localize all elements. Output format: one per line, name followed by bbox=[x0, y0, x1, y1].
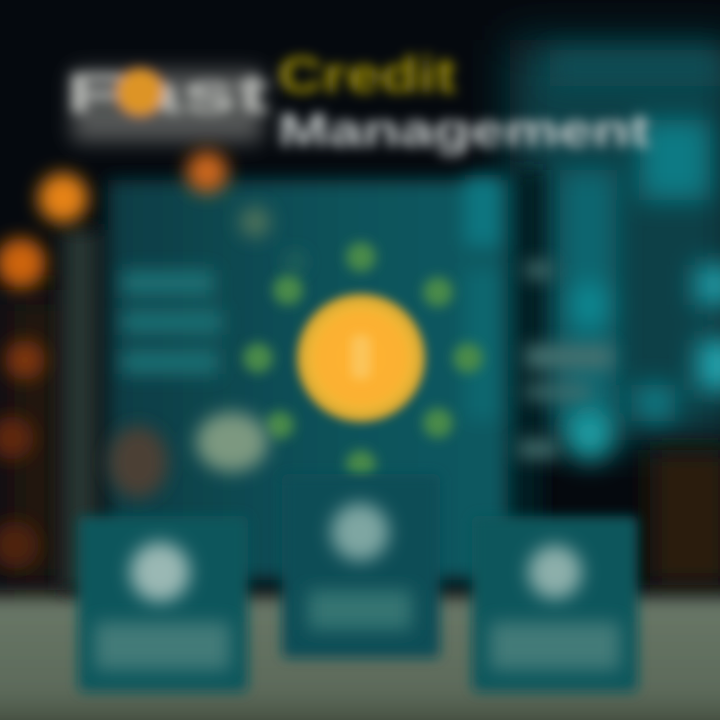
icon: orange glowing dots trail bbox=[0, 151, 304, 569]
panel: card right bbox=[472, 516, 638, 692]
panel: right teal glowing building bbox=[550, 50, 720, 461]
text block: card right bbox=[490, 622, 620, 670]
text block: card left bbox=[95, 622, 230, 670]
icon: card left bbox=[130, 542, 190, 602]
icon: sun rays bbox=[243, 242, 483, 480]
illustration: lower left objects bbox=[108, 412, 268, 498]
title: Fast Credit Management: Fast bbox=[65, 61, 270, 124]
icon: card middle bbox=[331, 503, 389, 561]
title: Fast Credit Management: Credit bbox=[278, 47, 456, 103]
title: Fast Credit Management: Management bbox=[278, 104, 650, 156]
panel: card middle bbox=[282, 474, 440, 658]
text block: left panel lines bbox=[122, 270, 222, 374]
panel: central teal board bbox=[62, 170, 543, 590]
icon: sun coin bbox=[297, 294, 425, 422]
icon: card right bbox=[528, 545, 582, 599]
text block: card middle bbox=[308, 590, 412, 630]
text block: right panel lines bbox=[518, 262, 613, 458]
title: Fast Credit Management bbox=[65, 47, 650, 156]
panel: card left bbox=[78, 516, 248, 692]
